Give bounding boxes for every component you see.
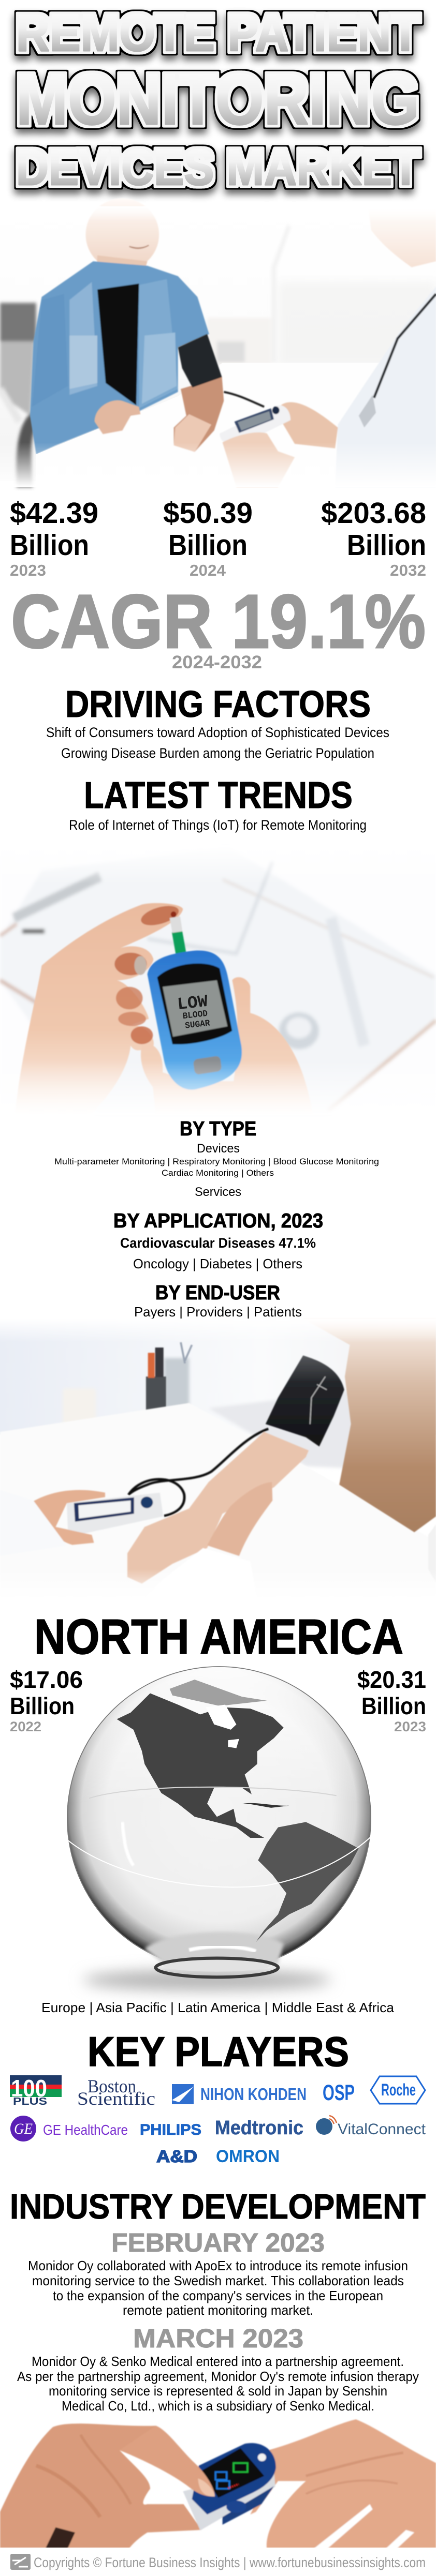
market values [10,497,426,579]
driving factors: Growing Disease Burden among the Geriatric Population [61,745,374,761]
north america value 2023: 2023 [394,1719,426,1734]
north america value 2022: Billion [10,1693,75,1719]
glass ring lines [68,1835,373,1887]
north america value 2022: 2022 [10,1719,41,1734]
holding hand [207,1482,272,1556]
logo: 100 plus [10,2075,62,2107]
patient fist [95,400,140,434]
development: february 2023: to the expansion of the company's services in the European [53,2288,383,2303]
logo: a&d: A&D [156,2147,197,2166]
value 2023: $42.39 [10,497,98,530]
value 2023: 2023 [10,561,46,579]
value 2032: 2032 [390,561,426,579]
by application [113,1210,323,1271]
by type: Services [195,1185,241,1199]
patient forearm and hand [174,377,224,452]
meter display text [177,992,211,1032]
development: march 2023: Monidor Oy & Senko Medical entered into a partnership agreement. [32,2354,404,2369]
logo: boston scientific [77,2076,155,2109]
north america value 2022: $17.06 [10,1666,83,1693]
logo: boston scientific: Scientific [77,2088,155,2109]
table [0,1403,436,1598]
blood pressure cuff [178,334,222,387]
meter display text: LOW [177,992,209,1015]
logo: roche [371,2076,425,2104]
handheld monitor [220,405,290,445]
footer logo [10,2554,31,2570]
development: march 2023: MARCH 2023 [133,2324,303,2353]
logo: boston scientific: Boston [88,2076,136,2096]
person's shirt [303,1319,436,1532]
other regions: Europe | Asia Pacific | Latin America | Middle East & Africa [41,2000,395,2015]
fades [0,845,436,1115]
value 2032 [321,497,426,579]
by type: Devices [197,1142,240,1156]
hudson bay [206,1704,236,1730]
north america value 2022 [10,1666,83,1734]
value 2024: Billion [168,529,248,562]
globe glass base [144,1932,284,1965]
development: february 2023 [28,2228,408,2318]
left hand [0,2423,211,2551]
sleeves [144,1548,257,1598]
by application: Oncology | Diabetes | Others [133,1256,302,1271]
meter display text: SUGAR [184,1019,210,1031]
logo: vitalconnect [316,2116,426,2138]
logo: ge healthcare [10,2116,128,2141]
by type: Multi-parameter Monitoring | Respiratory Monitoring | Blood Glucose Monitoring [54,1157,379,1166]
fades [0,1319,436,1599]
by application: BY APPLICATION, 2023 [113,1210,323,1232]
value 2024: $50.39 [163,497,253,530]
latest trends: LATEST TRENDS [84,775,353,816]
cuff [266,1355,344,1446]
great lakes [228,1739,239,1748]
test strip [172,931,186,954]
logo: nihon kohden [172,2084,307,2104]
north america value 2023: $20.31 [357,1666,426,1693]
photo: patient having blood pressure measured by doctor [0,198,436,487]
photo: hands with pulse oximeter [0,2419,436,2551]
driving factors: Shift of Consumers toward Adoption of Sophisticated Devices [46,725,389,740]
oximeter display [201,2448,264,2498]
driving factors [46,684,389,761]
development: february 2023: Monidor Oy collaborated with ApoEx to introduce its remote infusion [28,2258,408,2273]
by end-user: Payers | Providers | Patients [134,1304,302,1320]
development: february 2023: FEBRUARY 2023 [111,2228,325,2257]
latest trends [69,775,367,833]
left hand [16,903,183,1114]
doctor's hand [30,1490,105,1545]
value 2024: 2024 [190,561,226,579]
arctic islands [170,1680,267,1706]
value 2024 [163,497,253,579]
meter display text: BLOOD [182,1009,208,1022]
value 2032: Billion [347,529,426,562]
logo: medtronic: Medtronic [215,2117,303,2139]
photo: hands holding blood glucose meter [0,845,436,1115]
logo: omron: OMRON [216,2147,280,2166]
value 2032: $203.68 [321,497,426,530]
value 2023 [10,497,98,579]
north america value 2023 [357,1666,426,1734]
patient black t-shirt [97,283,139,406]
logo: 100 plus: 100 [11,2075,47,2102]
doctor lower hand [223,432,295,487]
globe shadow [83,1970,331,1990]
key player logos [10,2075,426,2166]
right hand [141,977,313,1114]
doctor white coat [335,287,436,487]
index finger over device [120,2426,215,2496]
doctor hand on monitor [278,402,338,448]
logo: nihon kohden: NIHON KOHDEN [200,2085,307,2104]
development: february 2023: remote patient monitoring market. [123,2302,313,2318]
patient forearm [127,1432,309,1584]
logo: ge healthcare: GE [14,2120,33,2137]
by end-user: BY END-USER [155,1282,280,1304]
glucose meter [148,951,242,1090]
south america continent [256,1822,359,1942]
heading: key players: KEY PLAYERS [88,2029,349,2075]
driving factors: DRIVING FACTORS [65,684,371,725]
glass globe [67,1666,373,1977]
north america value 2023: Billion [361,1693,426,1719]
handheld monitor [67,1493,163,1537]
logo: ge healthcare: GE HealthCare [43,2122,128,2138]
by type [54,1118,379,1199]
oximeter blue cover [192,2443,276,2514]
development: march 2023: monitoring service is represented & sold in Japan by Senshin [49,2383,387,2399]
logo: osp: OSP [323,2080,355,2105]
patient head [85,198,159,271]
patient denim shirt [30,261,209,454]
oximeter body [183,2468,275,2530]
by type: BY TYPE [180,1118,256,1140]
caribbean islands [242,1803,289,1808]
development: march 2023: As per the partnership agreement, Monidor Oy's remote infusion therapy [17,2369,419,2384]
development: february 2023: monitoring service to the Swedish market. This collaboration leads [32,2273,404,2288]
title [16,4,419,196]
value 2023: Billion [10,529,89,562]
gaps between right hand fingers [311,2504,414,2551]
by application: Cardiovascular Diseases 47.1% [120,1235,316,1251]
right hand [250,2419,436,2551]
by end-user [134,1282,302,1320]
doctor face [369,209,436,267]
CAGR callout: 2024-2032 [172,652,262,672]
logo: 100 plus: PLUS [13,2096,47,2107]
development: march 2023 [17,2324,419,2414]
logo: vitalconnect: VitalConnect [338,2121,426,2138]
latest trends: Role of Internet of Things (IoT) for Remote Monitoring [69,817,367,833]
tube [128,1429,268,1495]
logo: philips: PHILIPS [140,2121,201,2138]
development: march 2023: Medical Co, Ltd., which is a subsidiary of Senko Medical. [62,2398,374,2414]
by type: Cardiac Monitoring | Others [162,1168,274,1178]
desk items [146,1342,192,1416]
north america continent [117,1694,284,1838]
photo: arm with blood pressure cuff on a table [0,1319,436,1599]
table [36,363,436,487]
logo: roche: Roche [381,2080,416,2099]
